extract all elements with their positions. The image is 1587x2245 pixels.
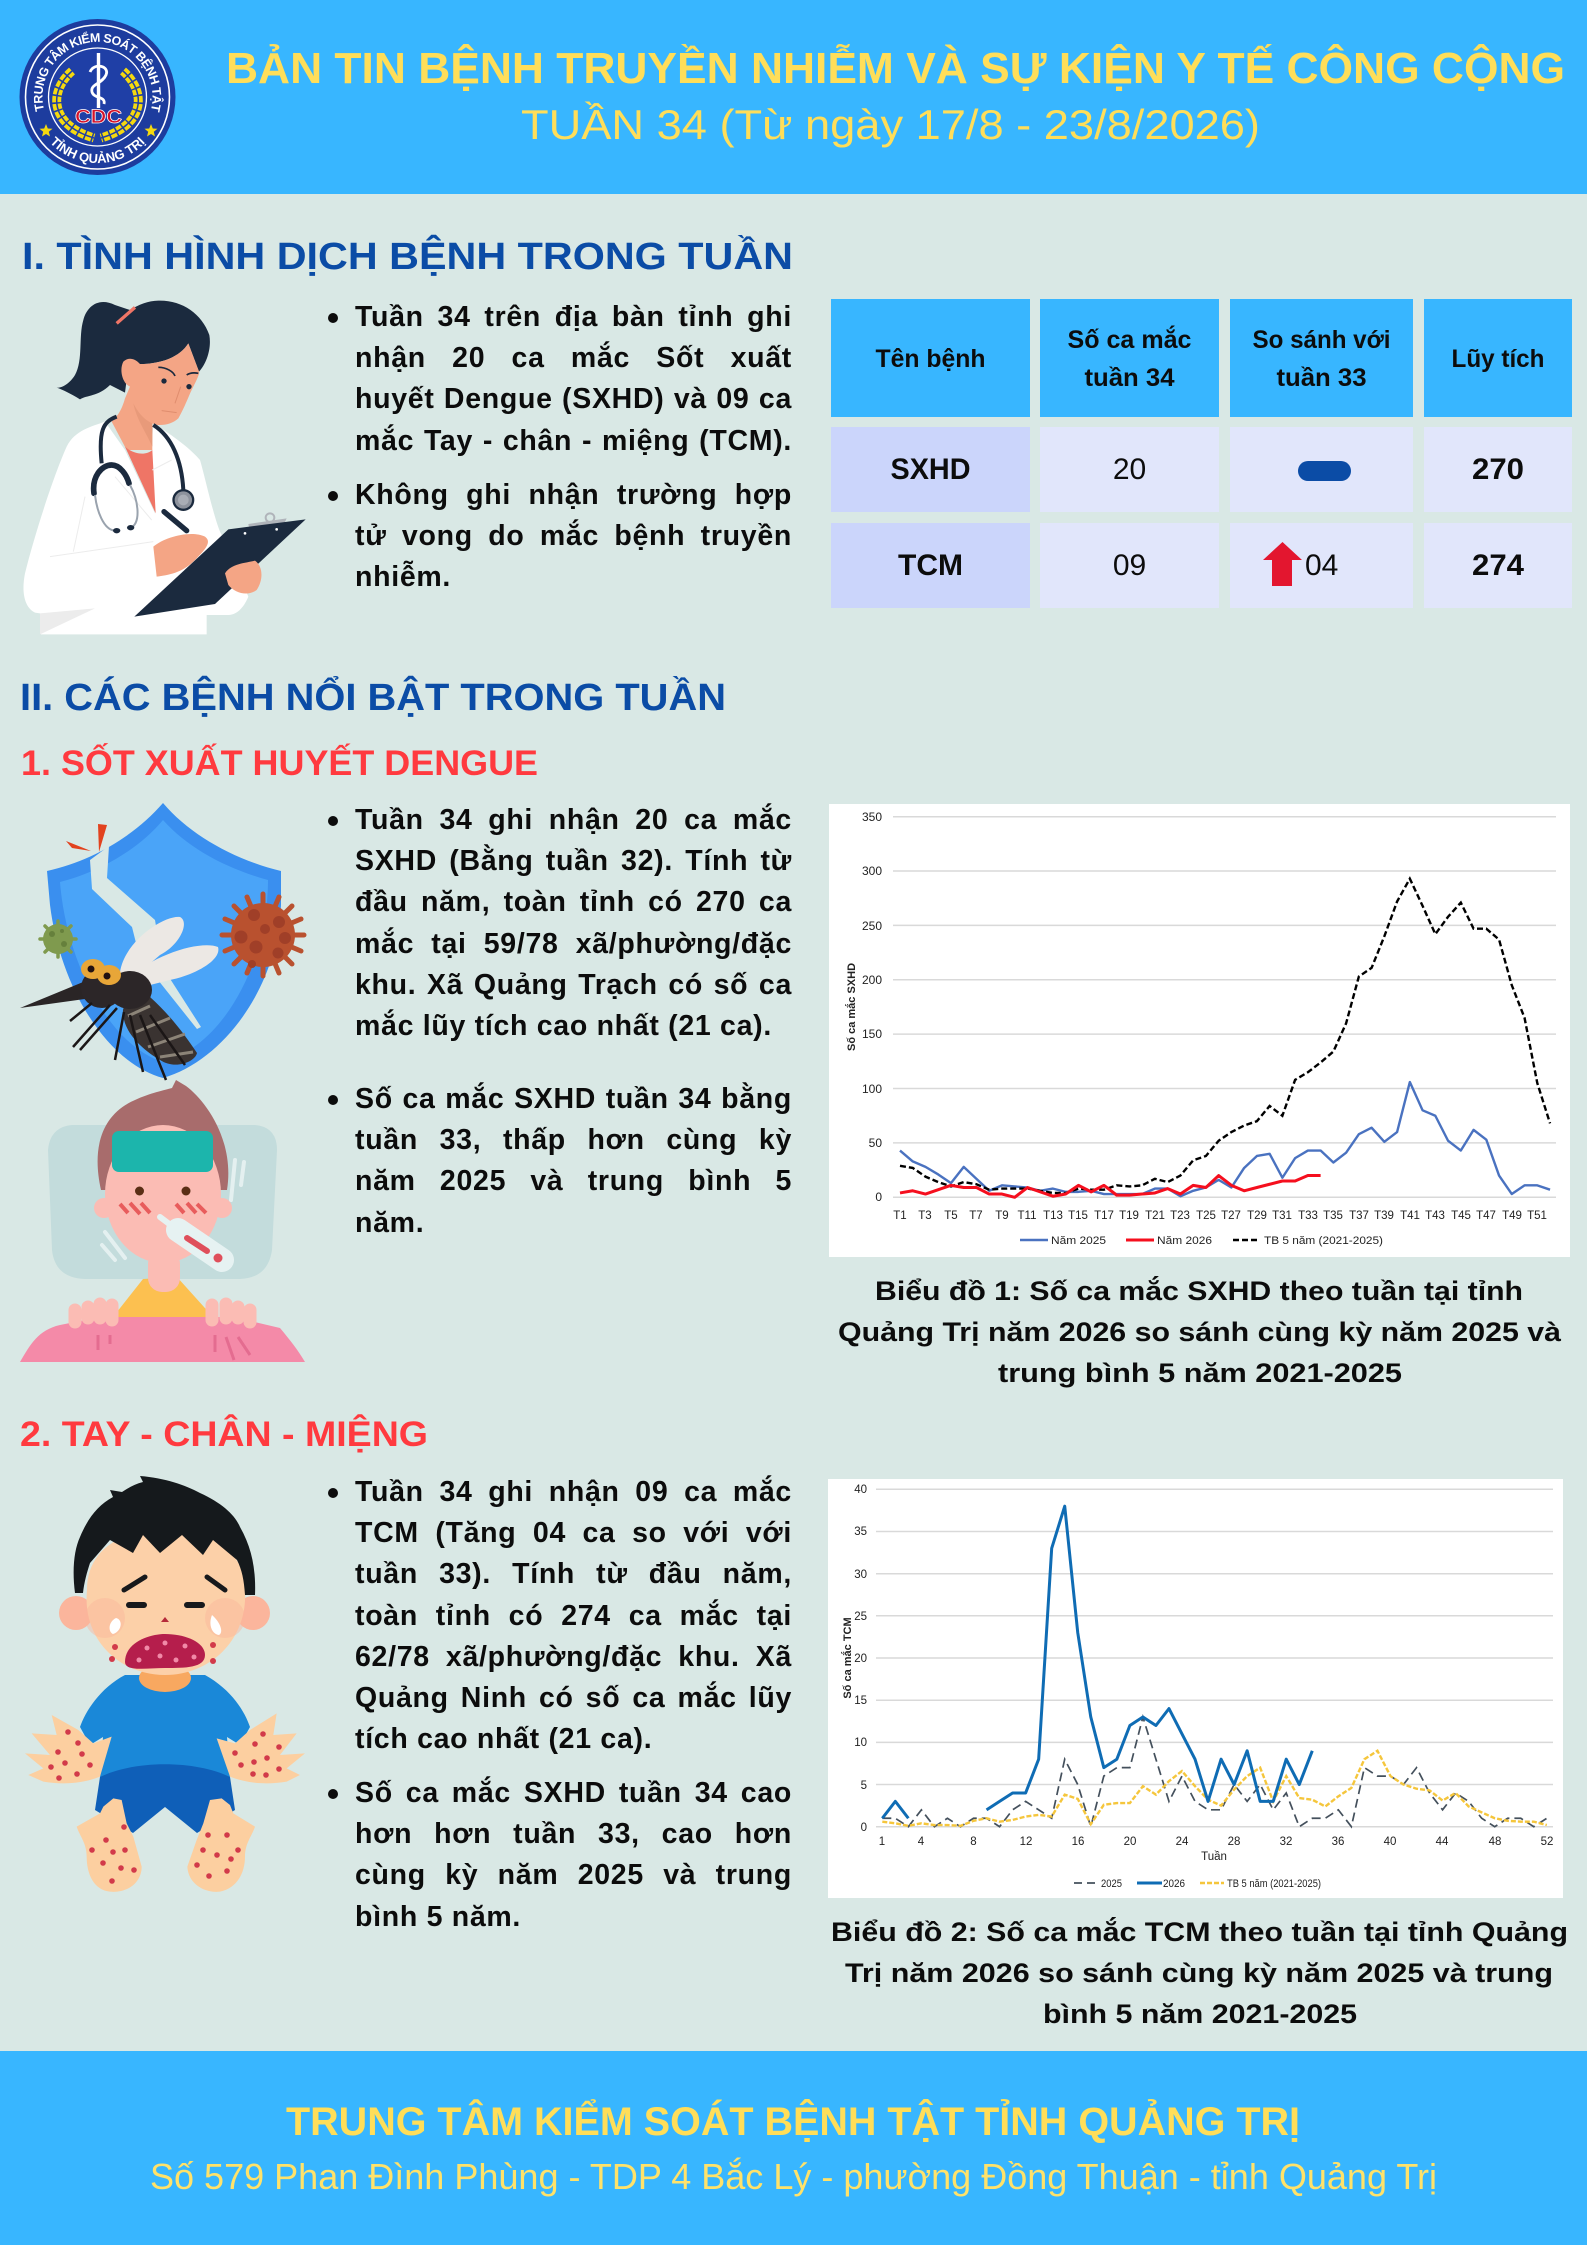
chart 1 grid lines [893, 817, 1556, 1197]
chart 2 legend [1074, 1878, 1321, 1890]
text block: weekly summary bullet 1: Tuần 34 trên địa bàn tỉnh ghi [355, 301, 792, 333]
footer title: TRUNG TÂM KIỂM SOÁT BỆNH TẬT TỈNH QUẢNG TRỊ [286, 2097, 1300, 2144]
caption: chart 2 [831, 1916, 1568, 2029]
caption: chart 2: bình 5 năm 2021-2025 [1043, 1999, 1357, 2029]
chart 1 x axis ticks: T37 [1349, 1210, 1369, 1222]
text block: hand foot mouth bullet 2: Số ca mắc SXHD tuần 34 cao [355, 1777, 792, 1809]
text block: dengue bullet 2 [328, 1082, 792, 1239]
table row: TCM: 274 [1472, 549, 1524, 582]
chart 1 legend: Năm 2026 [1157, 1235, 1212, 1247]
chart 1 y axis ticks: 200 [862, 973, 882, 987]
table header cell: Lũy tích [1424, 299, 1572, 417]
icon: CDC logo: CDC [75, 107, 122, 128]
chart 1 x axis ticks: T31 [1272, 1210, 1292, 1222]
chart 1 x axis ticks: T33 [1298, 1210, 1318, 1222]
chart 2 legend: 2026 [1163, 1878, 1185, 1890]
caption: chart 1 [838, 1275, 1562, 1388]
chart 1 x axis ticks: T9 [995, 1210, 1009, 1222]
chart 2 x axis ticks: 48 [1489, 1836, 1501, 1848]
chart 1 x axis ticks [893, 1210, 1547, 1222]
chart 2 x axis ticks [879, 1836, 1553, 1848]
icon: boy with hand foot mouth disease [25, 1476, 305, 1892]
text block: weekly summary bullet 1: mắc Tay - chân - miệng (TCM). [355, 425, 792, 457]
chart 1 x axis ticks: T49 [1502, 1210, 1522, 1222]
icon: doctor illustration [23, 301, 306, 634]
table header cell: So sánh với tuần 33 [1230, 299, 1413, 417]
chart 1 y axis ticks: 250 [862, 919, 882, 933]
chart 2 y axis ticks: 25 [854, 1611, 867, 1623]
table header cell: Số ca mắc tuần 34: Số ca mắc [1068, 324, 1192, 354]
chart 1 x axis ticks: T29 [1247, 1210, 1267, 1222]
icon: CDC logo: TRUNG TÂM KIỂM SOÁT BỆNH TẬT [34, 32, 164, 112]
chart 2 x axis ticks: 44 [1436, 1836, 1449, 1848]
chart 1 x axis ticks: T23 [1170, 1210, 1190, 1222]
chart 2 x axis ticks: 24 [1176, 1836, 1189, 1848]
text block: hand foot mouth bullet 2: bình 5 năm. [355, 1901, 521, 1933]
chart 1 x axis ticks: T39 [1374, 1210, 1394, 1222]
chart 2 y axis ticks: 15 [854, 1695, 867, 1707]
table header cell: Tên bệnh [831, 299, 1030, 417]
chart 2 x axis ticks: 40 [1384, 1836, 1396, 1848]
left foot with rash [77, 1798, 142, 1892]
chart 1 y axis ticks: 150 [862, 1027, 882, 1041]
text block: weekly summary bullet 2: tử vong do mắc bệnh truyền [355, 520, 792, 552]
table header cell: Số ca mắc tuần 34: tuần 34 [1084, 364, 1175, 392]
chart 1 y axis ticks: 350 [862, 810, 882, 824]
text block: dengue bullet 2: Số ca mắc SXHD tuần 34 bằng [355, 1083, 792, 1115]
chart 2 x axis ticks: 12 [1020, 1836, 1032, 1848]
text block: dengue bullet 2: tuần 33, thấp hơn cùng kỳ [355, 1124, 792, 1156]
text block: weekly summary bullet 1: huyết Dengue (SXHD) và 09 ca [355, 383, 792, 415]
table header cell: So sánh với tuần 33: So sánh với [1252, 326, 1390, 354]
table row: TCM: 04 [1305, 549, 1338, 582]
heading: 1. dengue: 1. SỐT XUẤT HUYẾT DENGUE [21, 743, 538, 783]
text block: dengue bullet 1: mắc lũy tích cao nhất (21 ca). [355, 1010, 772, 1042]
table row: TCM [831, 523, 1572, 608]
table header cell: Số ca mắc tuần 34 [1040, 299, 1219, 417]
subtitle: TUẦN 34 (Từ ngày 17/8 - 23/8/2026) [521, 101, 1260, 148]
chart 1 legend: Năm 2025 [1051, 1235, 1106, 1247]
heading: section I: I. TÌNH HÌNH DỊCH BỆNH TRONG TUẦN [22, 234, 793, 278]
chart 1 x axis ticks: T17 [1094, 1210, 1114, 1222]
chart 2 x axis ticks: 20 [1124, 1836, 1136, 1848]
chart 1 legend [1020, 1235, 1383, 1247]
chart 1 x axis ticks: T47 [1476, 1210, 1496, 1222]
text block: dengue bullet 2: năm. [355, 1207, 424, 1239]
chart 1 y axis ticks: 0 [875, 1190, 882, 1204]
rash dots [48, 1729, 282, 1884]
chart 2 legend: TB 5 năm (2021-2025) [1227, 1878, 1321, 1890]
panel: summary table [831, 299, 1572, 608]
title: BẢN TIN BỆNH TRUYỀN NHIỄM VÀ SỰ KIỆN Y TẾ CÔNG CỘNG [226, 42, 1565, 93]
text block: hand foot mouth bullet 2 [328, 1776, 792, 1933]
chart 1 x axis ticks: T27 [1221, 1210, 1241, 1222]
table header cell: Tên bệnh: Tên bệnh [876, 345, 986, 373]
right foot with rash [187, 1798, 255, 1892]
chart 2 y axis ticks: 10 [854, 1737, 867, 1749]
chart 1 x axis ticks: T35 [1323, 1210, 1343, 1222]
heading: section II: II. CÁC BỆNH NỔI BẬT TRONG TUẦN [20, 674, 726, 719]
icon: red virus [222, 894, 304, 976]
footer band [0, 2051, 1587, 2245]
chart 1 line: 2025 [900, 1082, 1550, 1196]
chart 1 x axis ticks: T45 [1451, 1210, 1471, 1222]
icon: shield with mosquito and viruses [20, 803, 304, 1080]
chart 2 x axis ticks: 1 [879, 1836, 885, 1848]
chart 2 y axis ticks [854, 1484, 867, 1834]
chart 2 y axis ticks: 30 [854, 1569, 867, 1581]
chart 1 x axis ticks: T15 [1068, 1210, 1088, 1222]
text block: weekly summary bullet 2 [328, 479, 792, 593]
text block: weekly summary bullet 1 [328, 301, 792, 457]
chart 1 y axis ticks: 300 [862, 864, 882, 878]
text block: hand foot mouth bullet 1 [328, 1475, 792, 1755]
chart 1 y axis ticks [862, 810, 882, 1204]
chart 1 x axis ticks: T41 [1400, 1210, 1420, 1222]
chart 2 x axis ticks: 32 [1280, 1836, 1292, 1848]
text block: hand foot mouth bullet 1: Quảng Ninh có số ca mắc lũy [355, 1682, 792, 1714]
text block: hand foot mouth bullet 2: cùng kỳ năm 2025 và trung [355, 1859, 792, 1891]
icon: sick child with thermometer [20, 1080, 305, 1362]
chart 1 x axis ticks: T5 [944, 1210, 958, 1222]
chart 2 y axis ticks: 0 [861, 1822, 867, 1834]
table row: TCM: 09 [1113, 549, 1146, 582]
chart 1 x axis ticks: T51 [1527, 1210, 1547, 1222]
chart 2: hand foot mouth weekly cases [828, 1479, 1563, 1898]
text block: hand foot mouth bullet 1: Tuần 34 ghi nhận 09 ca mắc [355, 1476, 792, 1508]
text block: dengue bullet 1: mắc tại 59/78 xã/phường/đặc [355, 928, 792, 960]
right hand with rash [217, 1713, 305, 1783]
text block: dengue bullet 1: đầu năm, toàn tỉnh có 270 ca [355, 886, 792, 918]
chart 2 y axis ticks: 20 [854, 1653, 867, 1665]
chart 2 line: 5-year average [882, 1751, 1547, 1826]
chart 1 x axis ticks: T25 [1196, 1210, 1216, 1222]
text block: hand foot mouth bullet 2: hơn hơn tuần 33, cao hơn [355, 1818, 792, 1850]
text block: dengue bullet 1: khu. Xã Quảng Trạch có số ca [355, 969, 792, 1001]
text block: hand foot mouth bullet 1: 62/78 xã/phường/đặc khu. Xã [355, 1641, 792, 1673]
icon: CDC logo: TỈNH QUẢNG TRỊ [52, 136, 146, 165]
text block: dengue bullet 2: năm 2025 và trung bình 5 [355, 1165, 792, 1197]
text block: dengue bullet 1 [328, 803, 792, 1042]
chart 1 x axis ticks: T7 [969, 1210, 983, 1222]
chart 2 line: 2026 [882, 1506, 1312, 1818]
chart 1 y axis title: Số ca mắc SXHD [845, 963, 858, 1051]
chart 2 x axis ticks: 8 [970, 1836, 977, 1848]
table row: SXHD: 270 [1472, 453, 1524, 486]
chart 2 y axis ticks: 5 [861, 1780, 867, 1792]
chart 1 x axis ticks: T11 [1018, 1210, 1036, 1222]
chart 1 x axis ticks: T21 [1145, 1210, 1165, 1222]
chart 2 legend: 2025 [1101, 1878, 1122, 1890]
caption: chart 2: Biểu đồ 2: Số ca mắc TCM theo tuần tại tỉnh Quảng [831, 1916, 1568, 1947]
text block: dengue bullet 1: Tuần 34 ghi nhận 20 ca mắc [355, 804, 792, 836]
table row: TCM: TCM [898, 549, 963, 582]
table header cell: So sánh với tuần 33: tuần 33 [1276, 364, 1366, 392]
icon: mosquito [20, 917, 218, 1080]
text block: hand foot mouth bullet 1: toàn tỉnh có 274 ca mắc tại [355, 1600, 792, 1632]
chart 1 x axis ticks: T13 [1043, 1210, 1063, 1222]
chart 2 x axis title: Tuần [1201, 1851, 1227, 1863]
caption: chart 1: Biểu đồ 1: Số ca mắc SXHD theo tuần tại tỉnh [875, 1275, 1523, 1306]
text block: weekly summary bullet 2: nhiễm. [355, 561, 451, 593]
chart 1 y axis ticks: 100 [862, 1082, 882, 1096]
text block: hand foot mouth bullet 1: tuần 33). Tính từ đầu năm, [355, 1558, 792, 1590]
text block: hand foot mouth bullet 1: TCM (Tăng 04 ca so với với [355, 1517, 792, 1549]
table row: SXHD: SXHD [890, 453, 970, 486]
caption: chart 1: Quảng Trị năm 2026 so sánh cùng kỳ năm 2025 và [838, 1317, 1562, 1347]
chart 1 line: 5-year average [900, 879, 1550, 1193]
table header cell: Lũy tích: Lũy tích [1452, 345, 1544, 373]
chart 2 x axis ticks: 16 [1072, 1836, 1084, 1848]
icon: CDC logo [20, 19, 176, 175]
table row: SXHD [831, 427, 1572, 512]
chart 2 grid lines [876, 1489, 1553, 1827]
icon: green virus [40, 921, 76, 957]
text block: weekly summary bullet 2: Không ghi nhận trường hợp [355, 479, 792, 511]
caption: chart 2: Trị năm 2026 so sánh cùng kỳ năm 2025 và trung [845, 1958, 1553, 1988]
chart 2 y axis ticks: 35 [854, 1526, 867, 1538]
left hand with rash [25, 1715, 112, 1783]
chart 1 x axis ticks: T1 [893, 1210, 907, 1222]
chart 1 x axis ticks: T19 [1119, 1210, 1139, 1222]
chart 1 y axis ticks: 50 [869, 1136, 882, 1150]
chart 2 x axis ticks: 36 [1332, 1836, 1344, 1848]
chart 1: dengue weekly cases [829, 804, 1570, 1257]
caption: chart 1: trung bình 5 năm 2021-2025 [998, 1358, 1402, 1388]
chart 2 x axis ticks: 52 [1541, 1836, 1553, 1848]
chart 2 x axis ticks: 28 [1228, 1836, 1240, 1848]
text block: weekly summary bullet 1: nhận 20 ca mắc Sốt xuất [355, 342, 792, 374]
chart 2 y axis title: Số ca mắc TCM [841, 1617, 854, 1699]
chart 2 y axis ticks: 40 [854, 1484, 867, 1496]
table row: SXHD: 20 [1113, 453, 1146, 486]
footer address: Số 579 Phan Đình Phùng - TDP 4 Bắc Lý - phường Đồng Thuận - tỉnh Quảng Trị [150, 2156, 1437, 2197]
chart 2 x axis ticks: 4 [918, 1836, 925, 1848]
chart 1 x axis ticks: T3 [918, 1210, 932, 1222]
chart 1 x axis ticks: T43 [1425, 1210, 1445, 1222]
header band [0, 0, 1587, 194]
text block: dengue bullet 1: SXHD (Bằng tuần 32). Tính từ [355, 845, 792, 877]
heading: 2. hand foot mouth: 2. TAY - CHÂN - MIỆNG [20, 1414, 428, 1454]
text block: hand foot mouth bullet 1: tích cao nhất (21 ca). [355, 1723, 652, 1755]
chart 1 legend: TB 5 năm (2021-2025) [1264, 1235, 1383, 1247]
chart 1 line: 2026 [900, 1176, 1321, 1197]
chart 2 line: 2025 [882, 1717, 1547, 1827]
